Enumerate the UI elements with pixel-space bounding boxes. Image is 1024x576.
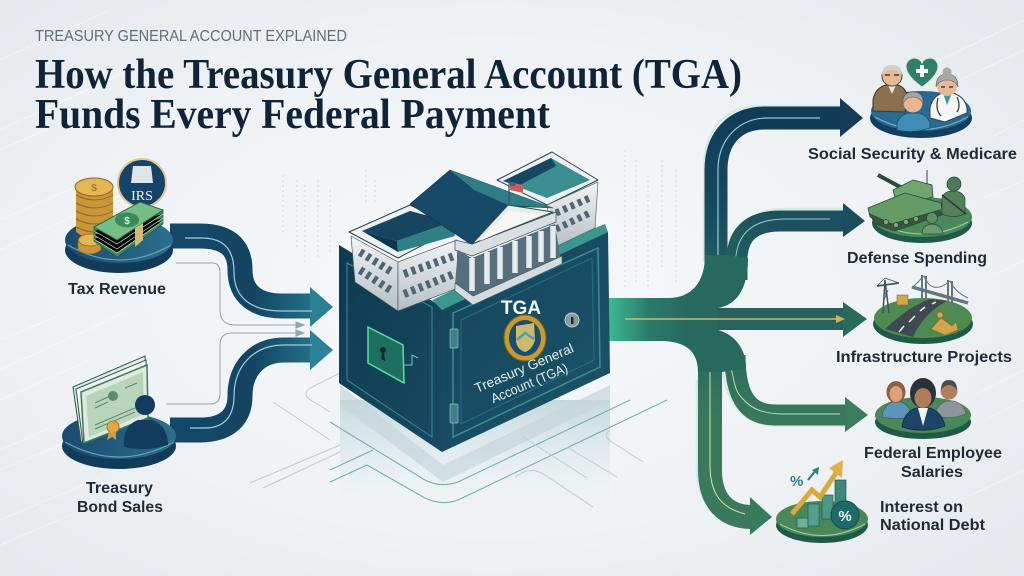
icon: left employee [882, 381, 912, 418]
icon: right employee [935, 380, 966, 418]
gold centre line [625, 315, 845, 323]
arrow: to federal salaries [728, 355, 868, 432]
label: federal employee salaries: Federal Employee [864, 445, 1002, 462]
panel: treasury bond source [62, 356, 176, 469]
icon: treasury seal [504, 315, 546, 361]
icon: elderly man [873, 65, 907, 112]
icon: nurse patient [897, 92, 930, 132]
label: treasury general account on door: Account (TGA) [489, 360, 570, 406]
icon: bond certificates [73, 356, 148, 444]
arrow: tax revenue to vault [170, 236, 333, 327]
icon: green lock panel [368, 327, 418, 383]
floor circuit lines under the vault [250, 373, 667, 510]
label: infrastructure projects: Infrastructure Projects [836, 349, 1012, 366]
icon: doctor [930, 68, 967, 122]
label: federal employee salaries [864, 445, 1002, 481]
arrow: to infrastructure [700, 302, 867, 337]
right wing [497, 152, 598, 248]
vault top edge [432, 224, 608, 310]
icon: soldiers [922, 177, 966, 234]
portico [455, 205, 562, 305]
panel: federal employee salaries [875, 378, 971, 439]
platform [870, 91, 972, 138]
building on top of vault [349, 152, 598, 311]
panel: social security and medicare [870, 58, 972, 138]
icon: IRS seal: IRS [131, 189, 153, 204]
main roof [410, 170, 553, 245]
icon: investor silhouette [124, 395, 168, 449]
icon: percent badge: % [838, 508, 852, 525]
icon: rising bars [797, 480, 846, 528]
left wing [349, 205, 458, 311]
panel: interest on national debt [776, 460, 868, 543]
label: interest on national debt: National Debt [880, 517, 986, 534]
arrow: to national debt [710, 355, 772, 535]
panel: central TGA vault [339, 152, 610, 452]
eyebrow heading: TREASURY GENERAL ACCOUNT EXPLAINED [35, 28, 347, 45]
label: interest on national debt [880, 499, 986, 534]
label: TGA on door: TGA [501, 298, 541, 319]
label: federal employee salaries: Salaries [901, 464, 963, 481]
icon: road [885, 299, 947, 337]
title: Funds Every Federal Payment [35, 92, 550, 138]
platform [62, 413, 176, 469]
trunk junction [608, 255, 748, 372]
icon: percent with small arrow: % [790, 473, 803, 490]
outlines [697, 106, 848, 528]
icon: coin stack: $ [91, 183, 97, 194]
vault left face [339, 245, 442, 452]
icon: gold trend arrow [792, 460, 843, 514]
arrow: trunk and branches to spending categories [608, 98, 868, 535]
icon: materials [897, 295, 958, 335]
title: How the Treasury General Account (TGA) [35, 52, 742, 98]
icon: flag [509, 180, 523, 205]
hinges [450, 329, 458, 423]
label: treasury general account on door: Treasury General [472, 341, 576, 396]
label: interest on national debt: Interest on [880, 499, 963, 516]
label: treasury bond sales [77, 480, 163, 516]
label: tax revenue: Tax Revenue [68, 281, 166, 298]
icon: heart shield [906, 58, 938, 87]
label: treasury bond sales: Treasury [86, 480, 153, 497]
platform [873, 298, 973, 344]
vault right face [442, 232, 610, 452]
panel: tax revenue source [65, 159, 173, 273]
icon: crane [877, 278, 899, 313]
title [35, 52, 742, 138]
icon: bridge [912, 275, 968, 307]
platform [872, 197, 972, 243]
icon: tank [868, 170, 942, 231]
label: social security and medicare: Social Security & Medicare [808, 146, 1017, 163]
platform [776, 501, 868, 543]
platform [875, 397, 971, 439]
arrow: to social security [716, 98, 863, 290]
thin connector lines [166, 263, 304, 404]
arrow: to defense [733, 203, 865, 280]
label: defense spending: Defense Spending [847, 250, 987, 267]
icon: cash stack: $ [124, 216, 130, 227]
label: treasury bond sales: Bond Sales [77, 499, 163, 516]
platform [65, 217, 173, 273]
icon: centre employee [902, 378, 945, 430]
panel: defense spending [868, 170, 972, 243]
panel: infrastructure projects [873, 275, 973, 344]
arrow: bond sales to vault [170, 330, 333, 430]
icon: door keyhole knob [565, 313, 579, 327]
